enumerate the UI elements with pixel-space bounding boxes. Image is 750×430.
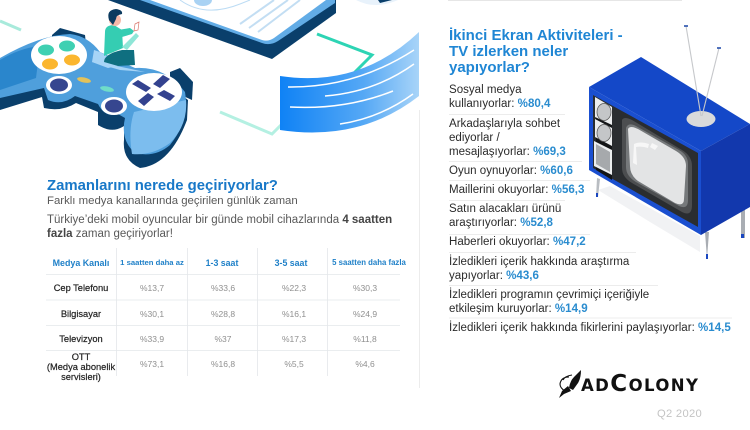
- row: television: %33,9: [140, 334, 164, 344]
- row: television: %11,8: [353, 334, 377, 344]
- row: mobile phone: %13,7: [140, 283, 164, 293]
- table header row: 1-3 saat: [206, 258, 238, 268]
- row: OTT: %73,1: [140, 359, 164, 369]
- mobile time statement: Türkiye’deki mobil oyuncular bir günde mobil cihazlarında 4 saatten: [47, 214, 392, 226]
- row: computer: %16,1: [282, 309, 306, 319]
- heading: where they spend time: Zamanlarını nerede geçiriyorlar?: [47, 178, 278, 194]
- row: television: %17,3: [282, 334, 306, 344]
- table header row: 3-5 saat: [275, 258, 307, 268]
- item: content research: [449, 254, 630, 282]
- row: television: %37: [214, 334, 232, 344]
- heading: second screen activities: İkinci Ekran Aktiviteleri -: [449, 27, 623, 44]
- item: games: Oyun oynuyorlar: %60,6: [449, 165, 573, 177]
- blue curved ribbon: [280, 32, 419, 132]
- media channel table: [47, 258, 406, 382]
- heading: second screen activities: yapıyorlar?: [449, 59, 530, 76]
- row: OTT: %4,6: [355, 359, 375, 369]
- table grid: [46, 248, 400, 376]
- row: computer: %24,9: [353, 309, 377, 319]
- row: OTT: %16,8: [211, 359, 235, 369]
- row: OTT: [47, 352, 375, 382]
- item: social media: kullanıyorlar: %80,4: [449, 98, 550, 110]
- table header row: Medya Kanalı: [53, 258, 109, 268]
- item: product research: Satın alacakları ürünü: [449, 203, 561, 215]
- game controller: [0, 28, 193, 168]
- item: content research: İzledikleri içerik hakkında araştırma: [449, 256, 629, 268]
- AdColony logo wordmark: ADCOLONY: [581, 371, 699, 397]
- row: mobile phone: %30,3: [353, 283, 377, 293]
- mobile time statement: [47, 214, 392, 240]
- row: computer: %28,8: [211, 309, 235, 319]
- heading: second screen activities: [449, 27, 623, 76]
- retro television: [589, 26, 750, 259]
- item: chatting: ediyorlar /: [449, 132, 500, 144]
- row: mobile phone: %22,3: [282, 283, 306, 293]
- row: computer: %30,1: [140, 309, 164, 319]
- row: mobile phone: Cep Telefonu: [54, 283, 108, 293]
- item: chatting: [449, 118, 566, 158]
- row: mobile phone: [54, 283, 377, 294]
- heading: second screen activities: TV izlerken neler: [449, 43, 568, 60]
- row: computer: [61, 309, 377, 320]
- item: news: Haberleri okuyorlar: %47,2: [449, 236, 586, 248]
- item: social media: [449, 84, 550, 110]
- table header row: 1 saatten daha az: [120, 258, 184, 267]
- item: product research: araştırıyorlar: %52,8: [449, 217, 553, 229]
- row: OTT: OTT: [72, 352, 90, 362]
- table header row: [53, 258, 406, 268]
- decorative connector lines: [0, 21, 372, 134]
- row: OTT: (Medya abonelik: [47, 362, 115, 372]
- AdColony rocket logo icon: [559, 370, 581, 398]
- subtitle: Farklı medya kanallarında geçirilen günlük zaman: [47, 195, 298, 207]
- row: mobile phone: %33,6: [211, 283, 235, 293]
- section divider lines: [418, 110, 420, 388]
- row: television: [59, 334, 377, 344]
- item: social media: Sosyal medya: [449, 84, 522, 96]
- row: television: Televizyon: [59, 334, 103, 344]
- row: computer: Bilgisayar: [61, 309, 101, 319]
- list: second screen activities: [449, 84, 731, 334]
- item: content research: yapıyorlar: %43,6: [449, 270, 539, 282]
- item: sharing opinions: İzledikleri içerik hakkında fikirlerini paylaşıyorlar: %14,5: [449, 322, 731, 334]
- date label: Q2 2020: [657, 408, 702, 420]
- item: online content engagement: etkileşim kuruyorlar: %14,9: [449, 303, 588, 315]
- item: chatting: Arkadaşlarıyla sohbet: [449, 118, 560, 130]
- list separators: [449, 114, 732, 318]
- item: emails: Maillerini okuyorlar: %56,3: [449, 184, 584, 196]
- row: OTT: %5,5: [284, 359, 304, 369]
- item: chatting: mesajlaşıyorlar: %69,3: [449, 146, 566, 158]
- tablet illustration: [108, 0, 398, 59]
- item: online content engagement: İzledikleri programın çevrimiçi içeriğiyle: [449, 289, 649, 301]
- row: OTT: servisleri): [61, 372, 101, 382]
- table header row: 5 saatten daha fazla: [332, 258, 406, 267]
- item: online content engagement: [449, 288, 649, 315]
- mobile time statement: fazla zaman geçiriyorlar!: [47, 228, 173, 240]
- person sitting on controller: [104, 9, 139, 66]
- item: product research: [449, 203, 561, 229]
